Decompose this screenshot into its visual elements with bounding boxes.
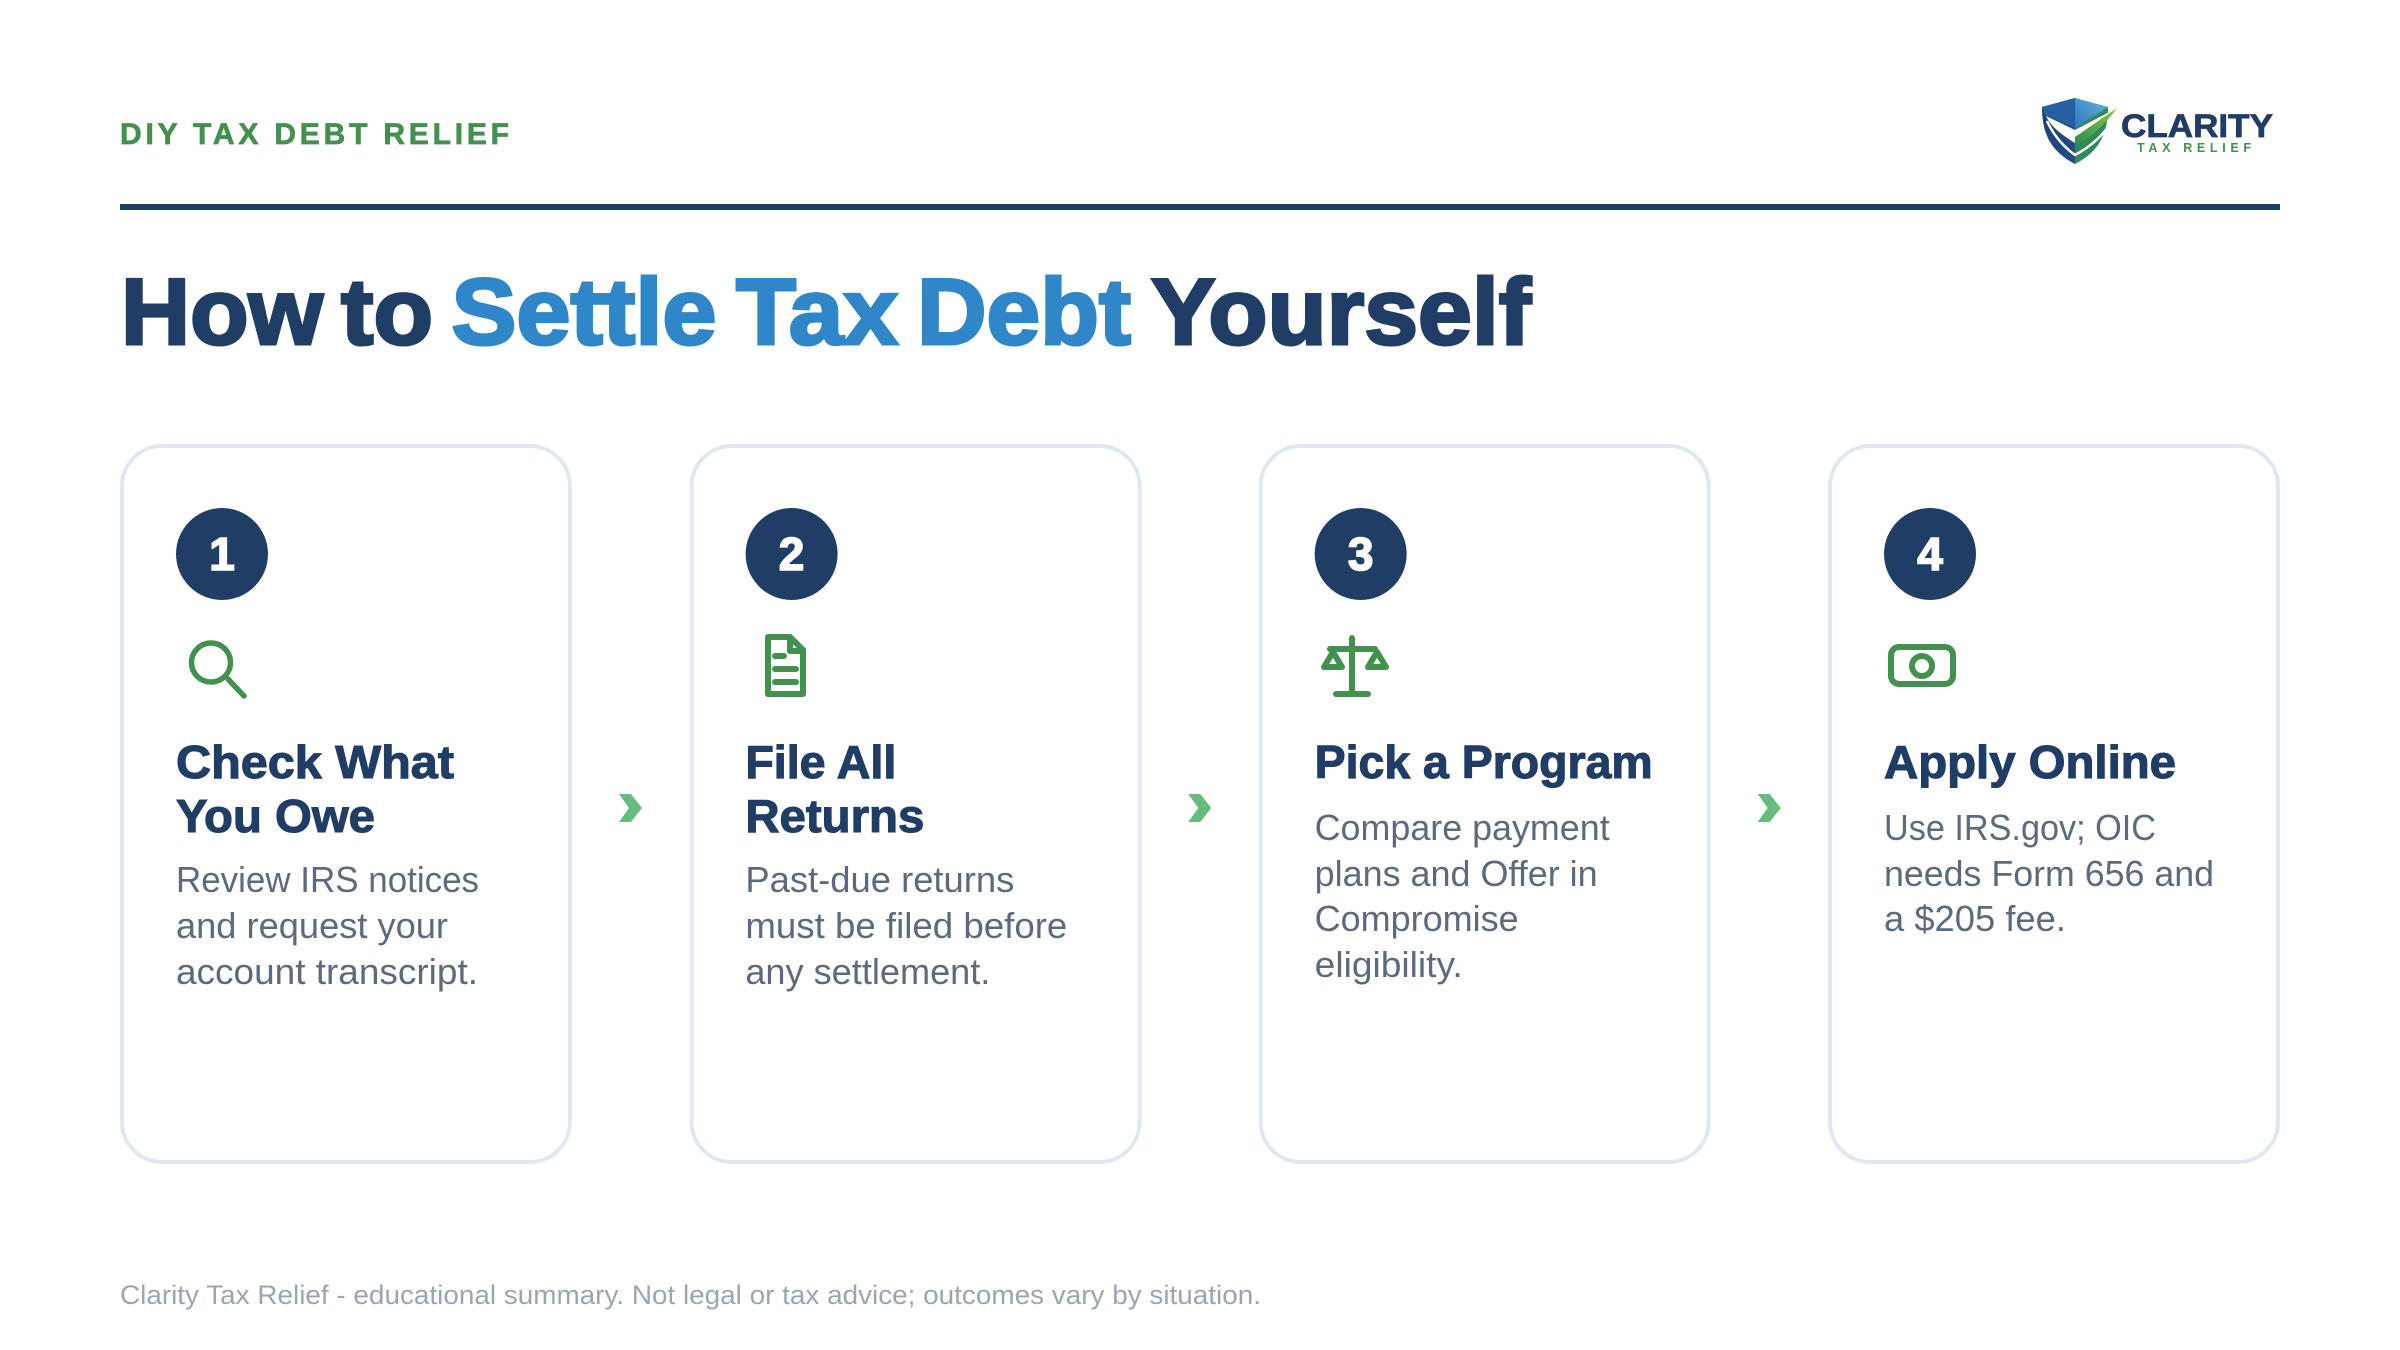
step number 2 bbox=[746, 508, 838, 600]
step 2 text bbox=[745, 859, 1067, 992]
icon: document bbox=[768, 637, 803, 694]
arrow 1 bbox=[619, 794, 642, 822]
panel: step 2 bbox=[692, 446, 1140, 1162]
icon: scales bbox=[1324, 638, 1386, 694]
step 3 heading: Pick a Program bbox=[1315, 736, 1653, 788]
step 1 heading bbox=[176, 736, 454, 842]
title: Debt bbox=[917, 259, 1131, 364]
panel: step 3 bbox=[1261, 446, 1709, 1162]
step 1 text: and request your bbox=[176, 905, 448, 946]
step 2 heading bbox=[745, 736, 924, 842]
kicker: DIY Tax Debt Relief: DIY TAX DEBT RELIEF bbox=[120, 118, 509, 151]
step 4 text: needs Form 656 and bbox=[1884, 853, 2214, 894]
logo: Clarity Tax Relief bbox=[2042, 98, 2273, 164]
step 3 text: plans and Offer in bbox=[1315, 853, 1598, 894]
icon: magnifier bbox=[192, 643, 244, 696]
icon: banknote bbox=[1891, 647, 1953, 684]
arrow 3 bbox=[1758, 794, 1781, 822]
title: Yourself bbox=[1151, 259, 1532, 364]
step 1 text: account transcript. bbox=[176, 951, 478, 992]
step 3 text bbox=[1315, 807, 1610, 985]
step 1 heading: Check What bbox=[176, 736, 454, 788]
step 4 text: a $205 fee. bbox=[1884, 898, 2066, 939]
step number 1: 1 bbox=[209, 528, 235, 580]
step number 1 bbox=[176, 508, 268, 600]
step 2 heading: Returns bbox=[745, 790, 924, 842]
step 2 text: must be filed before bbox=[745, 905, 1067, 946]
arrow 2 bbox=[1188, 794, 1211, 822]
step 3 text: eligibility. bbox=[1315, 944, 1463, 985]
step 3 text: Compare payment bbox=[1315, 807, 1610, 848]
title: How bbox=[121, 259, 324, 364]
title: Settle bbox=[452, 259, 716, 364]
step 4 text bbox=[1884, 807, 2214, 939]
step 1 text bbox=[176, 859, 479, 992]
step 2 heading: File All bbox=[745, 736, 896, 788]
panel: step 1 bbox=[122, 446, 570, 1162]
step number 3: 3 bbox=[1348, 528, 1373, 580]
title: Tax bbox=[736, 259, 898, 364]
step 4 heading: Apply Online bbox=[1884, 736, 2176, 788]
step 3 text: Compromise bbox=[1315, 898, 1519, 939]
step 2 text: any settlement. bbox=[745, 951, 990, 992]
step number 4: 4 bbox=[1917, 528, 1943, 580]
step 4 text: Use IRS.gov; OIC bbox=[1884, 807, 2156, 848]
panel: step 4 bbox=[1830, 446, 2278, 1162]
title: to bbox=[341, 259, 433, 364]
step number 2: 2 bbox=[779, 528, 804, 580]
logo shield bbox=[2042, 98, 2117, 164]
step 1 heading: You Owe bbox=[176, 790, 375, 842]
step number 3 bbox=[1315, 508, 1407, 600]
step 2 text: Past-due returns bbox=[745, 859, 1014, 900]
footer disclaimer: Clarity Tax Relief - educational summary. Not legal or tax advice; outcomes vary by situation. bbox=[120, 1280, 1261, 1310]
step number 4 bbox=[1884, 508, 1976, 600]
logo wordmark: CLARITY bbox=[2121, 108, 2273, 144]
step 1 text: Review IRS notices bbox=[176, 859, 479, 900]
logo tagline: TAX RELIEF bbox=[2137, 141, 2251, 155]
